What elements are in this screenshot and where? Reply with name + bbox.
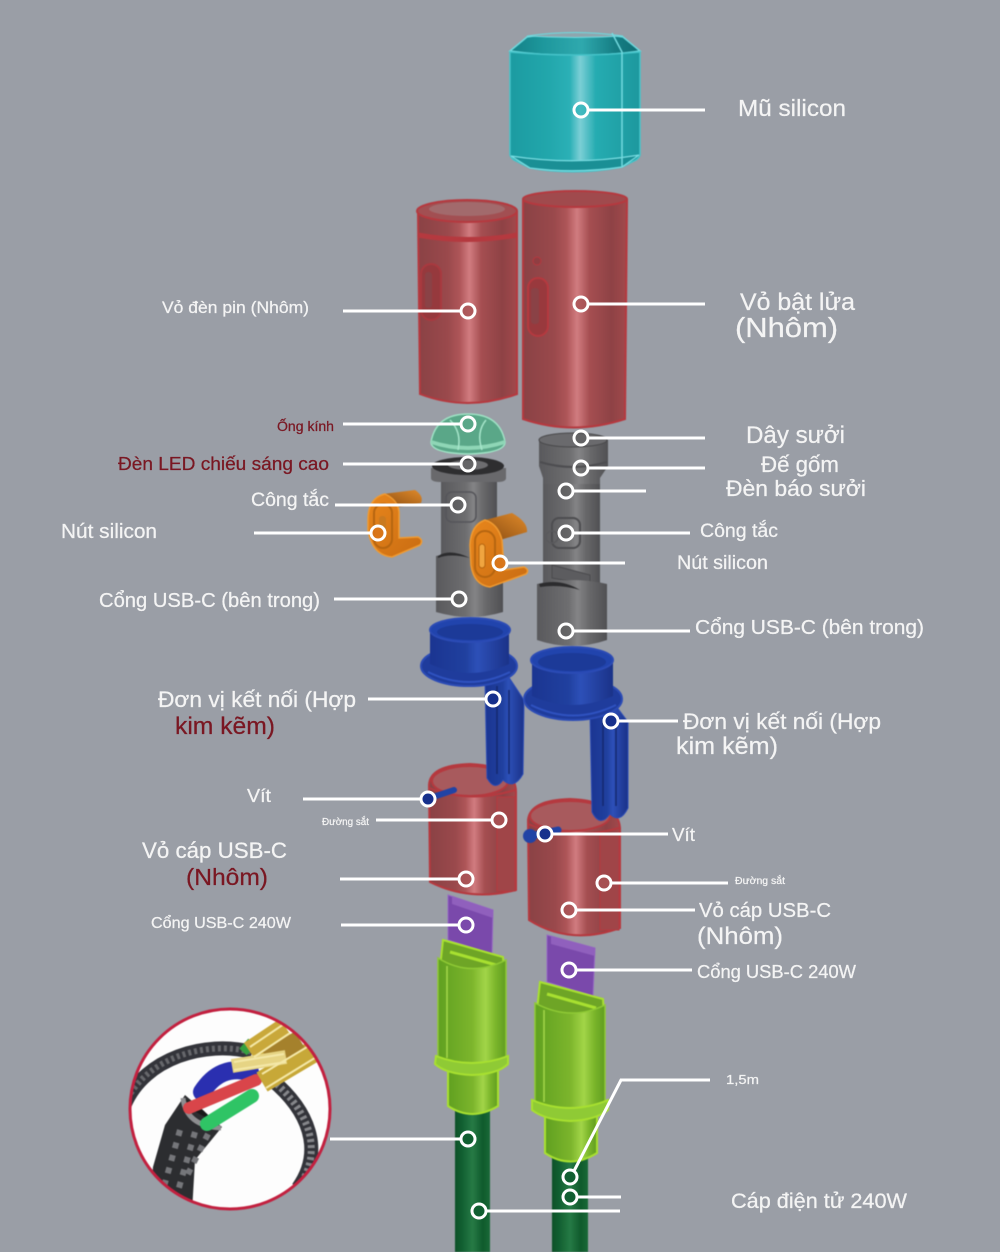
callout: right switch: Công tắc — [700, 520, 778, 542]
callout: left silicone button — [61, 521, 385, 543]
callout: left iron rail — [322, 813, 506, 828]
callout: flashlight shell: Vỏ đèn pin (Nhôm) — [162, 298, 309, 317]
callout: 240W electronic cable: Cáp điện tử 240W — [731, 1190, 907, 1213]
callout: flashlight shell — [162, 298, 475, 318]
callout: right iron rail — [597, 874, 785, 890]
callout: right USB-C cable shell: (Nhôm) — [697, 923, 783, 950]
callout: left 240W USB-C port — [151, 914, 473, 932]
callout: heating wire — [574, 422, 845, 449]
part: lower left red cable shell — [429, 764, 516, 894]
callout: left iron rail: Đường sắt — [322, 815, 369, 828]
callout: left USB-C port: Cổng USB-C (bên trong) — [99, 590, 320, 612]
part: flashlight aluminium shell — [417, 200, 517, 403]
connector line: inset to left cable — [330, 1132, 475, 1146]
callout: right screw — [538, 825, 695, 845]
part: lens dome — [431, 414, 505, 454]
callout: right connector unit: kim kẽm) — [676, 733, 778, 760]
callout: heating wire: Dây sưởi — [746, 422, 845, 449]
callout: left USB-C cable shell: Vỏ cáp USB-C — [142, 838, 287, 863]
callout: right connector unit — [604, 709, 881, 760]
part: right green boot — [532, 982, 608, 1162]
callout: left connector unit — [158, 687, 500, 740]
callout: left connector unit: kim kẽm) — [175, 713, 275, 740]
callout: ceramic base: Đế gốm — [761, 452, 839, 477]
callout: right screw: Vít — [672, 825, 695, 845]
callout: 240W electronic cable — [472, 1190, 907, 1218]
callout: left switch — [251, 489, 465, 512]
callout: heating indicator: Đèn báo sưởi — [726, 476, 866, 501]
callout: left 240W USB-C port: Cổng USB-C 240W — [151, 914, 292, 932]
callout: lens: Ống kính — [277, 417, 334, 434]
part: silicone cap — [510, 32, 640, 172]
callout: lens — [277, 417, 475, 434]
callout: cable length 1.5m — [563, 1072, 759, 1184]
part: screws — [430, 790, 558, 843]
part: purple USB-C plugs — [448, 895, 595, 996]
callout: right USB-C port: Cổng USB-C (bên trong) — [695, 617, 924, 639]
callout: lighter shell: Vỏ bật lửa — [740, 289, 856, 316]
callout: left USB-C port — [99, 590, 466, 612]
part: left green boot — [435, 940, 508, 1114]
callout: high-brightness LED — [118, 454, 475, 474]
part: right USB-C housing — [537, 580, 607, 646]
part: right blue connector — [524, 647, 628, 821]
callout: high-brightness LED: Đèn LED chiếu sáng cao — [118, 454, 329, 474]
part: left switch body — [431, 457, 506, 556]
part: right silicone button — [470, 513, 528, 587]
callout: lighter shell — [574, 289, 856, 343]
callout: heating indicator — [559, 476, 866, 501]
part: lighter aluminium shell — [523, 191, 627, 428]
callout: left USB-C cable shell — [142, 838, 473, 890]
part: right dark green cable — [552, 1156, 588, 1252]
part: left dark green cable — [455, 1110, 490, 1252]
callout: left screw: Vít — [247, 786, 271, 806]
callout: right USB-C cable shell — [562, 900, 831, 950]
callout: right USB-C port — [559, 617, 924, 639]
callout: right silicone button: Nút silicon — [677, 553, 768, 574]
callout: right connector unit: Đơn vị kết nối (Hợp — [683, 709, 881, 734]
callout: right switch — [559, 520, 778, 542]
part: lower right red cable shell — [528, 799, 620, 935]
callout: silicone cap: Mũ silicon — [738, 95, 846, 121]
part: left USB-C housing — [436, 552, 503, 617]
callout: silicone cap — [574, 95, 846, 121]
callout: lighter shell: (Nhôm) — [735, 312, 838, 343]
callout: left connector unit: Đơn vị kết nối (Hợp — [158, 687, 356, 712]
inset: braided cable photo — [125, 1009, 330, 1212]
callout: ceramic base — [574, 452, 839, 477]
callout: left USB-C cable shell: (Nhôm) — [186, 864, 268, 890]
callout: left silicone button: Nút silicon — [61, 521, 157, 543]
part: left silicone button — [368, 490, 422, 557]
callout: right USB-C cable shell: Vỏ cáp USB-C — [699, 900, 831, 922]
callout: right silicone button — [493, 553, 768, 574]
callout: right 240W USB-C port: Cổng USB-C 240W — [697, 962, 856, 982]
part: right switch body and heater — [539, 433, 608, 585]
callout: left switch: Công tắc — [251, 489, 329, 511]
callout: right iron rail: Đường sắt — [735, 874, 785, 887]
callout: cable length 1.5m: 1,5m — [726, 1072, 759, 1087]
callout: right 240W USB-C port — [562, 962, 856, 982]
callout: left screw — [247, 786, 435, 806]
part: left blue connector — [421, 618, 524, 786]
